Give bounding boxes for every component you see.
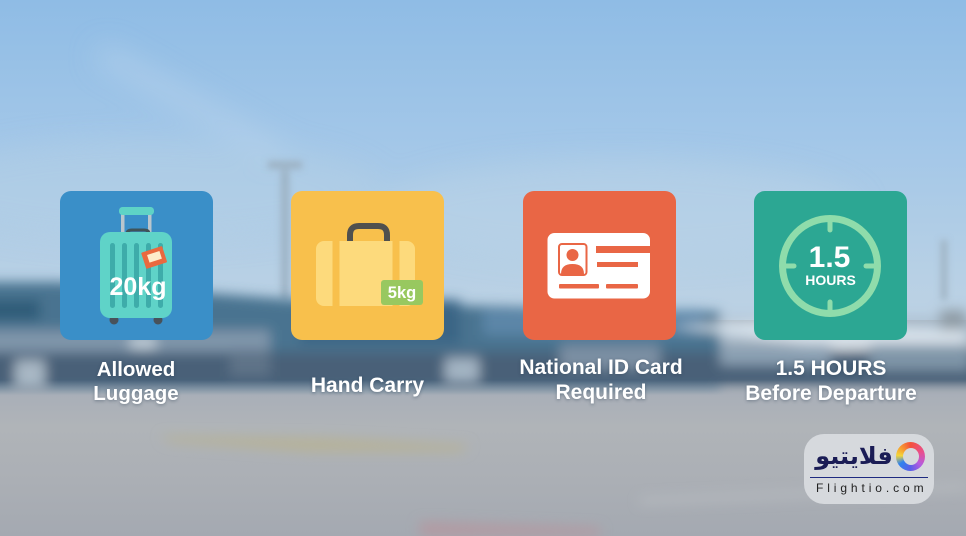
caption: allowed luggage: Luggage (93, 382, 179, 405)
icon: ID card (548, 233, 650, 298)
caption: 1.5 hours before departure: Before Departure (745, 382, 917, 405)
caption: allowed luggage (93, 358, 180, 406)
caption: 1.5 hours before departure: 1.5 HOURS (776, 357, 886, 380)
caption: national ID card (519, 356, 683, 406)
caption: hand carry: Hand Carry (311, 374, 424, 397)
logo persian name: فلایتیو (815, 442, 893, 470)
icon: clock 1.5 hours: HOURS (805, 272, 856, 288)
icon: suitcase 20kg: 20kg (110, 273, 166, 301)
logo icon: colored ring (896, 442, 925, 471)
icon: suitcase 20kg (100, 207, 172, 324)
panel: allowed luggage (60, 191, 213, 340)
logo badge (804, 434, 934, 504)
panel: hand carry (291, 191, 444, 340)
caption: allowed luggage: Allowed (97, 358, 175, 381)
icon: clock 1.5 hours: 1.5 (809, 241, 850, 274)
panel: national ID card (523, 191, 676, 340)
caption: 1.5 hours before departure (745, 357, 918, 407)
icon: briefcase 5kg (316, 223, 423, 306)
caption: national ID card: Required (555, 381, 646, 404)
caption: national ID card: National ID Card (519, 356, 683, 379)
icon: briefcase 5kg: 5kg (388, 284, 416, 302)
panel: 1.5 hours (754, 191, 907, 340)
logo domain: Flightio.com (816, 481, 928, 495)
icon: clock 1.5 hours (779, 215, 881, 317)
